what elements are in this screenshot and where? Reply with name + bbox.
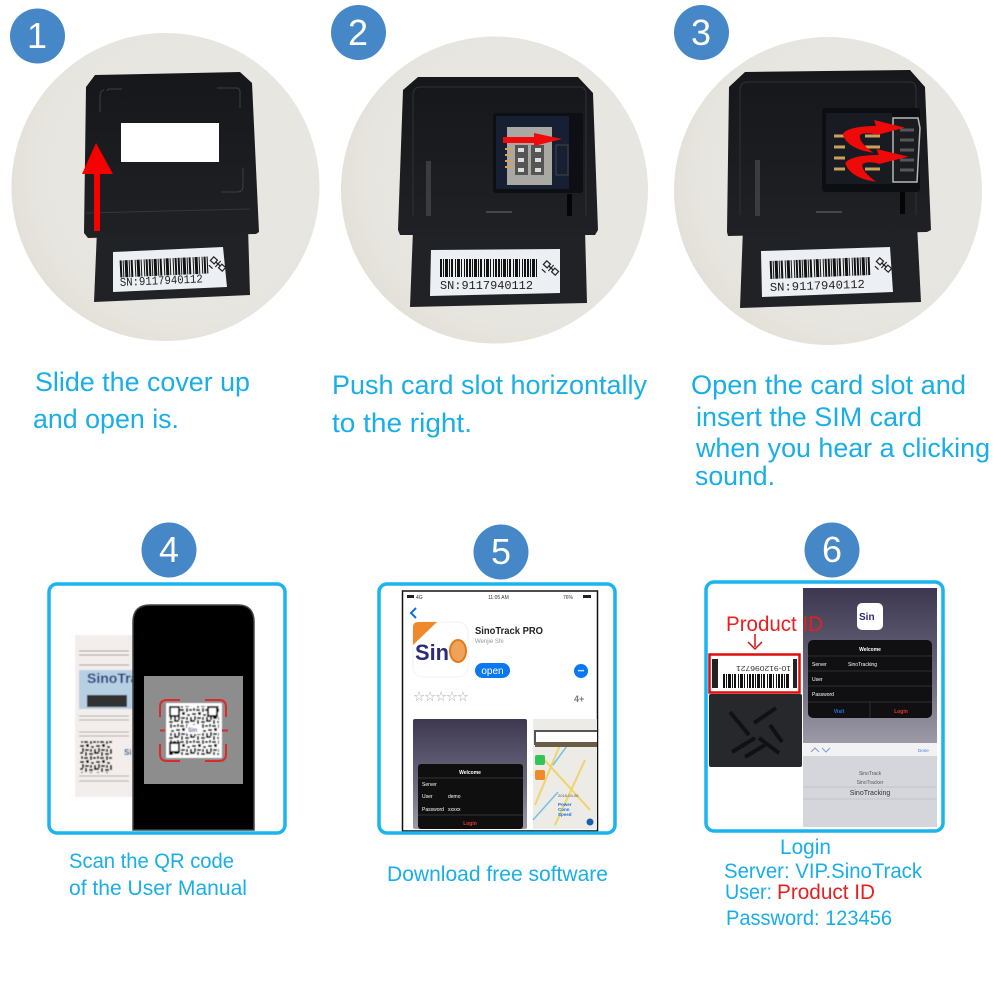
badge 1: 1 <box>27 15 47 56</box>
login screenshot: Password <box>422 807 444 813</box>
panel 6: product ID and login screen <box>706 582 943 831</box>
panel frame <box>379 584 615 833</box>
caption step 2: to the right. <box>332 408 472 438</box>
server picker <box>803 743 937 827</box>
panel 5: app store listing: Wenjie Shi <box>475 639 504 645</box>
caption step 3: insert the SIM card <box>696 402 922 432</box>
map screenshot: Speed <box>558 812 572 817</box>
caption step 4: Scan the QR code <box>69 850 234 873</box>
badge 6 <box>804 522 860 578</box>
badge 4: 4 <box>159 529 179 570</box>
QR code: Sin <box>188 728 198 734</box>
caption step 2 <box>332 370 647 438</box>
caption step 6: login details <box>724 836 922 930</box>
badge 6: 6 <box>822 529 842 570</box>
caption step 1: Slide the cover up <box>35 367 250 397</box>
curved arrows <box>843 120 908 182</box>
caption step 4 <box>69 850 247 900</box>
login screen: Visit <box>834 709 845 715</box>
open button <box>475 663 510 678</box>
device body <box>398 77 598 235</box>
login screen: SinoTracking <box>848 662 877 668</box>
device back <box>709 694 802 767</box>
badge 5: 5 <box>491 531 511 572</box>
step 2 photo: SIM slot closed <box>341 36 648 344</box>
panel frame <box>49 584 285 833</box>
product ID barcode <box>710 654 800 692</box>
label with barcode: SN:9117940112 <box>770 278 865 295</box>
label with barcode: SN:9117940112 <box>120 272 203 290</box>
login screen: Login <box>894 709 908 715</box>
caption step 6: login details: User: <box>725 881 772 904</box>
login screenshot: User <box>422 794 433 800</box>
caption step 3: sound. <box>695 461 775 491</box>
badge 5 <box>474 524 528 580</box>
QR code <box>166 703 222 758</box>
login screen: User <box>812 677 823 683</box>
login screen: Server <box>812 662 827 668</box>
caption step 3: Open the card slot and <box>691 370 966 400</box>
step 3 photo: SIM slot open <box>674 37 982 345</box>
server picker: SinoTrack <box>859 771 882 777</box>
login screen: Sin <box>859 612 875 623</box>
more button <box>574 664 588 678</box>
phone screen <box>402 591 598 831</box>
caption step 1: and open is. <box>33 404 179 434</box>
caption step 6: login details: Product ID <box>777 881 875 904</box>
open button: open <box>481 666 504 677</box>
server picker: SinoTracking <box>850 790 890 797</box>
back chevron <box>411 608 416 618</box>
login screenshot <box>413 719 527 829</box>
map screenshot: Conn <box>558 807 570 812</box>
app icon <box>413 622 468 677</box>
map screenshot <box>533 719 599 829</box>
badge 3: 3 <box>691 12 711 53</box>
label with barcode <box>113 247 227 292</box>
caption step 4: of the User Manual <box>69 877 247 900</box>
login screen <box>803 588 937 743</box>
caption step 5: Download free software <box>387 863 608 886</box>
open SIM slot <box>822 108 920 192</box>
login screenshot: demo <box>448 794 461 800</box>
login screenshot: Server <box>422 782 437 788</box>
arrow to barcode <box>748 634 762 649</box>
caption step 6: login details: Password: 123456 <box>726 907 892 930</box>
label with barcode: SN:9117940112 <box>440 279 533 293</box>
caption step 3: when you hear a clicking <box>695 433 990 463</box>
status bar: 11:05 AM <box>488 595 509 601</box>
arrow: slide up <box>82 143 113 231</box>
login screenshot: Welcome <box>459 770 481 776</box>
phone <box>133 605 254 830</box>
badge 3 <box>674 5 729 60</box>
badge 4 <box>142 522 196 578</box>
status bar <box>407 595 591 599</box>
label with barcode <box>761 247 893 297</box>
badge 1 <box>10 8 65 64</box>
server picker: Done <box>918 748 929 753</box>
login screen: Welcome <box>859 647 881 653</box>
status bar: 4G <box>416 595 423 601</box>
device connector <box>740 224 921 308</box>
more button: ••• <box>578 669 584 675</box>
device body <box>84 72 259 238</box>
red scan brackets <box>160 700 228 761</box>
scan window <box>144 676 243 784</box>
label with barcode <box>430 249 560 296</box>
map screenshot: Power <box>558 802 572 807</box>
star rating: ☆☆☆☆☆ <box>413 689 469 704</box>
device connector <box>410 230 587 307</box>
caption step 3 <box>691 370 990 491</box>
server picker: SinoTracker <box>857 780 884 786</box>
panel 4: scan QR code <box>49 584 285 833</box>
device body <box>727 70 931 236</box>
app title: SinoTrack PRO <box>475 625 543 637</box>
login screen: Password <box>812 692 834 698</box>
caption step 1 <box>33 367 250 434</box>
login screenshot: Login <box>463 821 477 827</box>
map screenshot: 2018-03-06 <box>558 793 579 798</box>
user manual paper: SinoTra <box>87 670 139 686</box>
arrow: push right <box>503 133 562 146</box>
caption step 6: login details: Server: VIP.SinoTrack <box>724 860 922 883</box>
panel 5: app store listing <box>379 584 615 833</box>
caption step 2: Push card slot horizontally <box>332 370 647 400</box>
device connector <box>94 226 250 302</box>
white redaction block <box>121 123 219 162</box>
badge 2: 2 <box>348 12 368 53</box>
step 1 photo: device with cover closed <box>12 33 320 341</box>
product ID label: Product ID <box>726 613 823 636</box>
app icon: Sin <box>415 640 449 665</box>
badge 2 <box>331 5 386 60</box>
login screenshot: xxxxx <box>448 807 461 813</box>
status bar: 76% <box>563 595 574 601</box>
user manual paper: Si <box>124 748 132 757</box>
product ID barcode: 10-912096721 <box>736 664 791 671</box>
user manual paper <box>75 635 139 797</box>
age rating: 4+ <box>574 694 584 704</box>
SIM window <box>493 113 583 193</box>
panel frame <box>706 582 943 831</box>
caption step 6: login details: Login <box>780 836 831 859</box>
